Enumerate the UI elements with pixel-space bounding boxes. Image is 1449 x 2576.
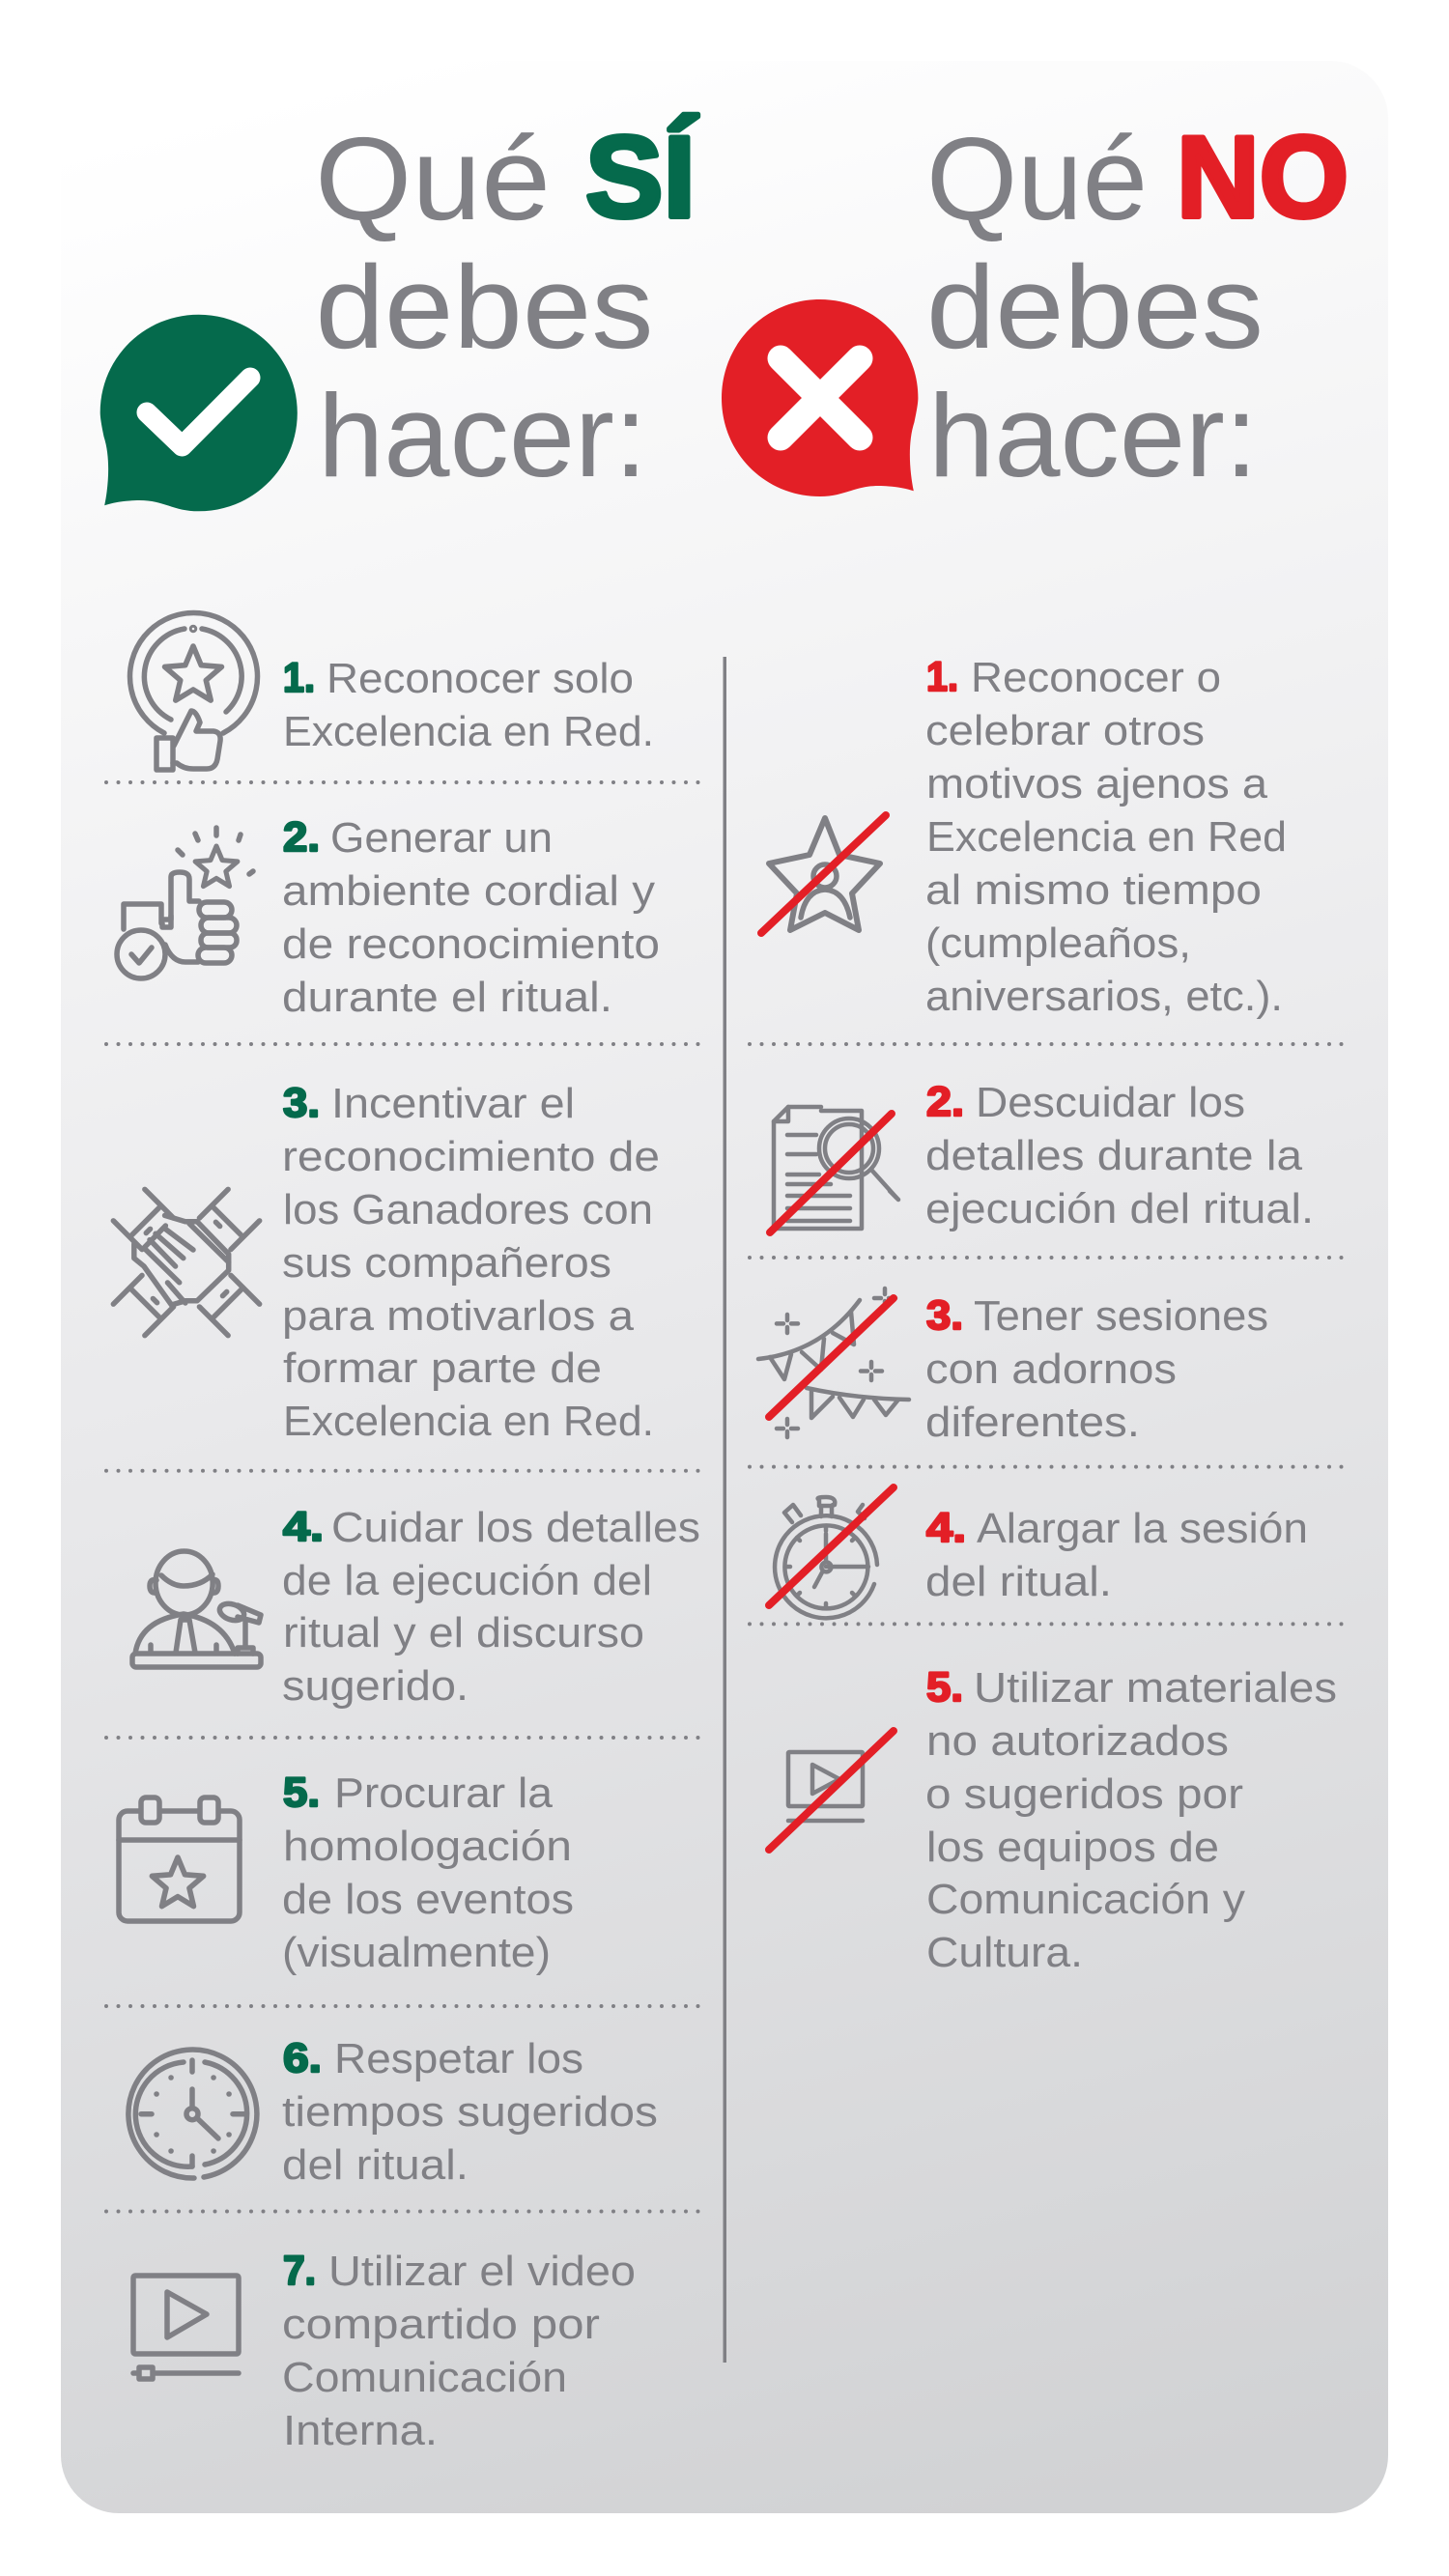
icon: red speech bubble with cross — [722, 299, 918, 496]
item 3: Tener sesiones con adornos: con adornos — [925, 1346, 1177, 1393]
item 2: Descuidar los detalles: detalles durante la — [925, 1133, 1303, 1179]
item 4: Cuidar los detalles: sugerido. — [282, 1663, 469, 1710]
heading: Qué SÍ debes hacer: SÍ — [585, 112, 698, 241]
item 5: Procurar la homologación — [282, 1769, 574, 1976]
icon: badge with thumb up — [130, 612, 258, 770]
item 3: Tener sesiones con adornos: Tener sesiones — [974, 1293, 1268, 1340]
item 3: Incentivar el reconocimiento: Incentivar el — [331, 1081, 575, 1127]
heading: Qué SÍ debes hacer: hacer: — [318, 370, 647, 501]
item 4: Alargar la sesión: 4. — [926, 1505, 966, 1551]
divider — [106, 1042, 699, 1046]
item 2: Generar un ambiente cordial: Generar un — [330, 815, 553, 862]
icon: speaker at podium — [132, 1551, 261, 1667]
item 2: Descuidar los detalles: ejecución del ritual. — [925, 1186, 1314, 1232]
item 5: Procurar la homologación: (visualmente) — [282, 1930, 551, 1976]
item 6: Respetar los tiempos: tiempos sugeridos — [282, 2089, 658, 2136]
item 2: Descuidar los detalles — [925, 1079, 1314, 1232]
item 4: Cuidar los detalles: Cuidar los detalles — [331, 1505, 700, 1551]
item 3: Incentivar el reconocimiento — [282, 1080, 660, 1445]
heading: Qué NO debes hacer: debes — [926, 241, 1264, 373]
item 2: Generar un ambiente cordial — [282, 814, 660, 1021]
item 5: Procurar la homologación: 5. — [283, 1769, 320, 1816]
item 6: Respetar los tiempos: 6. — [283, 2035, 322, 2081]
item 5: Procurar la homologación: Procurar la — [334, 1770, 554, 1817]
icon: crossed stopwatch — [769, 1487, 894, 1618]
item 1: Reconocer o celebrar otros motivos: aniversarios, etc.). — [925, 974, 1283, 1020]
item 3: Incentivar el reconocimiento: 3. — [283, 1080, 320, 1126]
icon: thumb with star and medal — [117, 828, 253, 978]
item 1: Reconocer solo: Reconocer solo — [327, 656, 634, 702]
item 5: Utilizar materiales: no autorizados — [926, 1718, 1229, 1765]
item 6: Respetar los tiempos: del ritual. — [282, 2142, 469, 2189]
item 2: Descuidar los detalles: 2. — [926, 1079, 964, 1125]
item 1: Reconocer o celebrar otros motivos: celebrar otros — [925, 708, 1205, 754]
item 5: Utilizar materiales: o sugeridos por — [925, 1771, 1243, 1818]
item 1: Reconocer o celebrar otros motivos: (cumpleaños, — [925, 920, 1191, 967]
icon: joined hands — [113, 1189, 260, 1336]
item 5: Utilizar materiales — [925, 1664, 1337, 1976]
item 1: Reconocer o celebrar otros motivos — [925, 654, 1287, 1020]
divider — [750, 1042, 1344, 1046]
heading: Qué NO debes hacer: Qué — [926, 113, 1148, 244]
icon: video player — [133, 2276, 239, 2379]
item 4: Alargar la sesión: del ritual. — [925, 1559, 1112, 1605]
heading: Qué NO debes hacer: hacer: — [928, 370, 1258, 501]
divider — [750, 1622, 1344, 1626]
icon: calendar with star — [119, 1798, 240, 1921]
icon: crossed star with person — [761, 815, 886, 933]
item 3: Incentivar el reconocimiento: formar parte de — [283, 1345, 602, 1392]
item 2: Generar un ambiente cordial: ambiente cordial y — [282, 868, 655, 915]
item 3: Tener sesiones con adornos: diferentes. — [925, 1400, 1140, 1446]
item 7: Utilizar el video — [282, 2248, 636, 2454]
item 2: Generar un ambiente cordial: 2. — [283, 814, 320, 861]
item 5: Utilizar materiales: Utilizar materiales — [974, 1665, 1337, 1712]
divider — [750, 1465, 1344, 1469]
item 6: Respetar los tiempos — [282, 2035, 658, 2189]
item 1: Reconocer solo — [283, 655, 654, 755]
divider — [106, 2210, 699, 2214]
item 4: Alargar la sesión: Alargar la sesión — [977, 1506, 1308, 1552]
item 3: Tener sesiones con adornos: 3. — [926, 1292, 963, 1339]
item 5: Utilizar materiales: los equipos de — [926, 1825, 1219, 1871]
item 4: Alargar la sesión — [925, 1505, 1308, 1605]
item 1: Reconocer solo: 1. — [283, 655, 315, 701]
item 3: Incentivar el reconocimiento: los Ganadores con — [283, 1187, 653, 1233]
item 2: Generar un ambiente cordial: durante el ritual. — [282, 975, 612, 1021]
item 1: Reconocer o celebrar otros motivos: 1. — [926, 654, 958, 700]
item 5: Utilizar materiales: 5. — [926, 1664, 963, 1711]
item 3: Tener sesiones con adornos — [925, 1292, 1268, 1446]
item 6: Respetar los tiempos: Respetar los — [334, 2036, 583, 2082]
item 1: Reconocer o celebrar otros motivos: Excelencia en Red — [926, 814, 1287, 861]
divider — [106, 1736, 699, 1740]
item 7: Utilizar el video: Comunicación — [282, 2355, 567, 2401]
item 7: Utilizar el video: Utilizar el video — [328, 2249, 636, 2295]
item 1: Reconocer o celebrar otros motivos: al mismo tiempo — [925, 867, 1262, 914]
item 4: Cuidar los detalles: ritual y el discurso — [283, 1610, 644, 1656]
heading: Qué NO debes hacer: NO — [1177, 112, 1349, 241]
item 1: Reconocer solo: Excelencia en Red. — [283, 709, 654, 755]
item 7: Utilizar el video: compartido por — [282, 2302, 600, 2348]
item 3: Incentivar el reconocimiento: Excelencia en Red. — [283, 1399, 654, 1445]
item 4: Cuidar los detalles — [282, 1504, 700, 1710]
item 3: Incentivar el reconocimiento: sus compañeros — [282, 1240, 611, 1287]
item 4: Cuidar los detalles: 4. — [283, 1504, 324, 1550]
icon: green speech bubble with check — [100, 315, 298, 511]
item 3: Incentivar el reconocimiento: para motivarlos a — [282, 1293, 635, 1340]
icon: clock — [128, 2050, 257, 2178]
heading: Qué NO debes hacer — [926, 112, 1349, 501]
divider — [750, 1256, 1344, 1260]
icon: crossed video player — [769, 1731, 894, 1850]
vertical divider — [723, 657, 726, 2363]
divider — [106, 1469, 699, 1473]
item 3: Incentivar el reconocimiento: reconocimiento de — [282, 1134, 660, 1180]
item 5: Procurar la homologación: de los eventos — [282, 1877, 574, 1923]
item 5: Utilizar materiales: Comunicación y — [926, 1877, 1245, 1923]
icon: crossed document with magnifier — [770, 1107, 898, 1232]
item 2: Descuidar los detalles: Descuidar los — [976, 1080, 1245, 1126]
heading: Qué SÍ debes hacer: debes — [315, 241, 653, 373]
item 5: Utilizar materiales: Cultura. — [926, 1930, 1083, 1976]
panel: NO list — [750, 654, 1344, 1976]
icon: crossed bunting — [758, 1288, 909, 1437]
item 7: Utilizar el video: Interna. — [283, 2408, 438, 2454]
item 4: Cuidar los detalles: de la ejecución del — [282, 1558, 652, 1604]
item 1: Reconocer o celebrar otros motivos: motivos ajenos a — [926, 761, 1268, 807]
divider — [106, 2004, 699, 2008]
heading: Qué SÍ debes hacer — [315, 112, 698, 501]
item 2: Generar un ambiente cordial: de reconocimiento — [282, 921, 660, 968]
item 1: Reconocer o celebrar otros motivos: Reconocer o — [971, 655, 1221, 701]
item 7: Utilizar el video: 7. — [283, 2248, 316, 2294]
panel: SÍ list — [106, 612, 700, 2454]
divider — [106, 780, 699, 784]
heading: Qué SÍ debes hacer: Qué — [315, 113, 551, 244]
item 5: Procurar la homologación: homologación — [283, 1824, 572, 1870]
